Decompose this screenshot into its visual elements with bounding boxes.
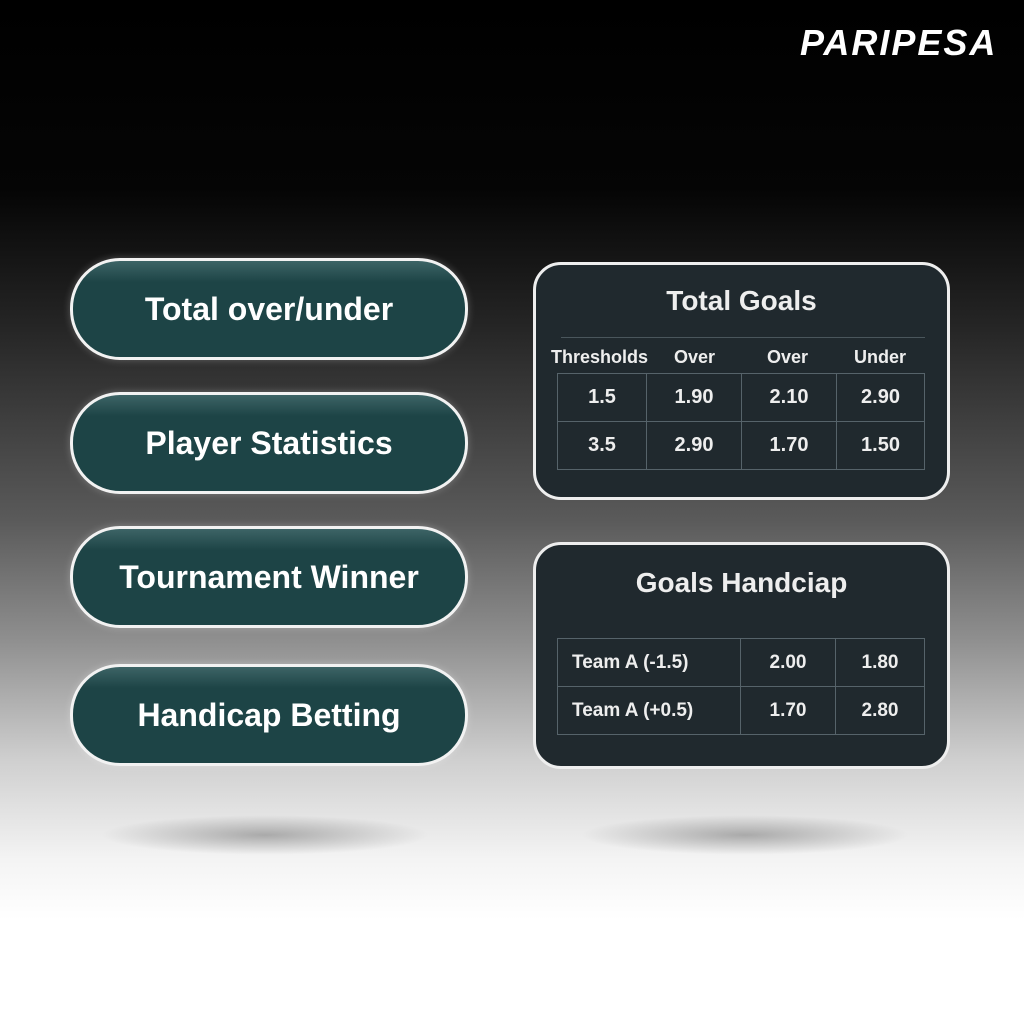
table header: Thresholds	[551, 347, 648, 367]
odds table: 2.90	[861, 386, 900, 408]
handicap table: 1.80	[862, 652, 898, 672]
handicap table: 2.80	[862, 700, 898, 720]
odds table: 3.5	[588, 434, 616, 456]
pill: Handicap Betting	[70, 664, 468, 766]
pill: Player Statistics	[70, 392, 468, 494]
odds table: 1.70	[770, 434, 808, 456]
handicap table: Team A (-1.5)	[572, 652, 688, 672]
handicap table	[557, 638, 925, 735]
panel: Total Goals	[533, 262, 950, 500]
odds table: 1.50	[861, 434, 900, 456]
pill: Tournament Winner: Tournament Winner	[119, 558, 419, 594]
table header: Under	[854, 347, 906, 367]
odds table: 1.5	[588, 386, 616, 408]
odds table: 1.90	[675, 386, 713, 408]
pill: Handicap Betting: Handicap Betting	[137, 696, 401, 732]
panel: Goals Handicap	[533, 542, 950, 769]
pill: Total over/under	[70, 258, 468, 360]
table header: Over	[674, 347, 715, 367]
table header	[551, 347, 906, 367]
pill: Tournament Winner	[70, 526, 468, 628]
handicap table: Team A (+0.5)	[572, 700, 693, 720]
odds table	[557, 373, 925, 470]
odds table: 2.90	[675, 434, 713, 456]
heading: Goals Handciap	[636, 567, 847, 598]
odds table: 2.10	[770, 386, 808, 408]
handicap table: 1.70	[770, 700, 806, 720]
table header: Over	[767, 347, 808, 367]
handicap table: 2.00	[770, 652, 806, 672]
heading: Total Goals	[666, 285, 817, 316]
logo: PARIPESA	[800, 22, 997, 63]
pill: Player Statistics: Player Statistics	[145, 424, 393, 460]
pill: Total over/under: Total over/under	[145, 290, 393, 326]
